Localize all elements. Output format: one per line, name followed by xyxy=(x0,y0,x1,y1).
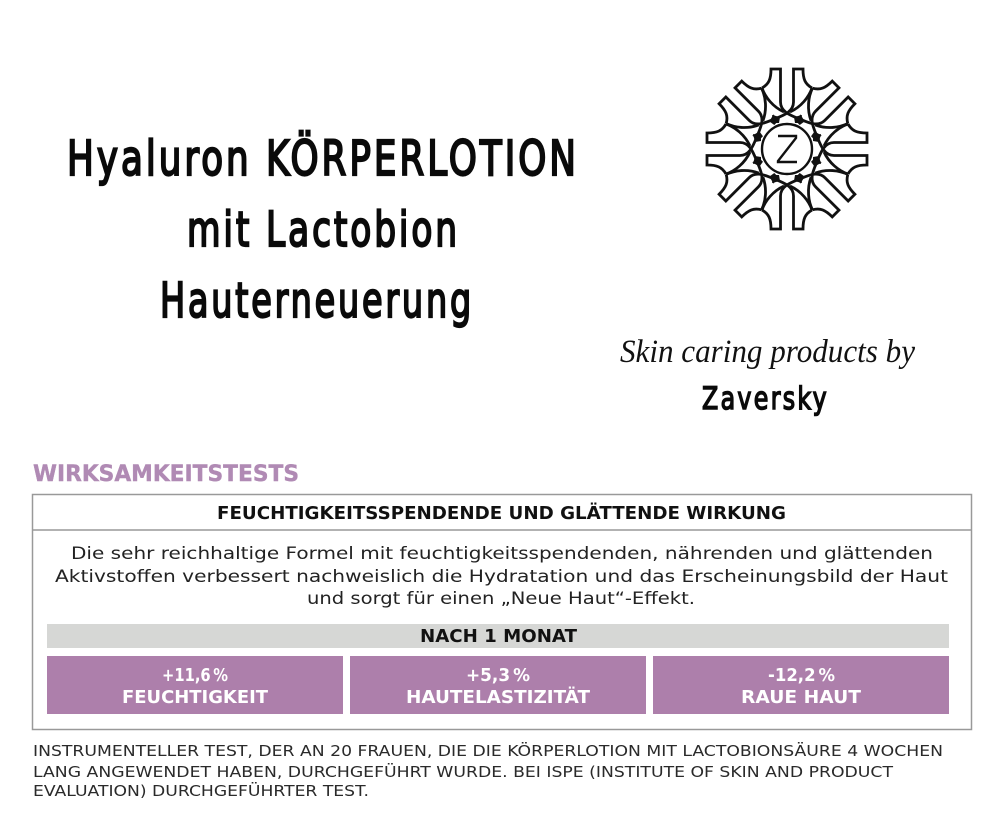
title: Hyaluron KÖRPERLOTION xyxy=(67,131,579,187)
description text: und sorgt für einen „Neue Haut“-Effekt. xyxy=(307,589,695,609)
timeframe bar xyxy=(47,624,949,648)
result: Hautelastizität: +5,3 % xyxy=(466,666,530,686)
result: Feuchtigkeit: +11,6 % xyxy=(162,666,228,686)
description text: Aktivstoffen verbessert nachweislich die Hydratation und das Erscheinungsbild der Haut xyxy=(55,567,948,587)
brand name: Zaversky xyxy=(702,381,829,417)
title: Hauterneuerung xyxy=(160,273,474,329)
result: Raue Haut: -12,2 % xyxy=(768,666,835,686)
panel heading: FEUCHTIGKEITSSPENDENDE UND GLÄTTENDE WIRKUNG xyxy=(217,502,786,524)
tagline: Skin caring products by xyxy=(620,334,915,370)
footnote xyxy=(33,741,943,800)
footnote: LANG ANGEWENDET HABEN, DURCHGEFÜHRT WURDE. BEI ISPE (INSTITUTE OF SKIN AND PRODUCT xyxy=(33,762,894,781)
result: Hautelastizität xyxy=(350,656,646,714)
heading: Wirksamkeitstests: WIRKSAMKEITSTESTS xyxy=(33,462,299,487)
result: Raue Haut: RAUE HAUT xyxy=(741,687,862,708)
footnote: INSTRUMENTELLER TEST, DER AN 20 FRAUEN, DIE DIE KÖRPERLOTION MIT LACTOBIONSÄURE 4 WOCHEN xyxy=(33,741,943,760)
title: mit Lactobion xyxy=(187,202,460,258)
result: Hautelastizität: HAUTELASTIZITÄT xyxy=(406,686,591,708)
footnote: EVALUATION) DURCHGEFÜHRTER TEST. xyxy=(33,781,369,800)
timeframe bar: NACH 1 MONAT xyxy=(420,626,578,647)
result: Raue Haut xyxy=(653,656,949,714)
title xyxy=(67,131,579,329)
description text: Die sehr reichhaltige Formel mit feuchtigkeitsspendenden, nährenden und glättenden xyxy=(71,544,933,564)
icon: Zaversky logo xyxy=(707,69,867,229)
panel: efficacy test xyxy=(32,494,972,730)
description text xyxy=(55,544,948,609)
result: Feuchtigkeit xyxy=(47,656,343,714)
result: Feuchtigkeit: FEUCHTIGKEIT xyxy=(122,687,269,708)
